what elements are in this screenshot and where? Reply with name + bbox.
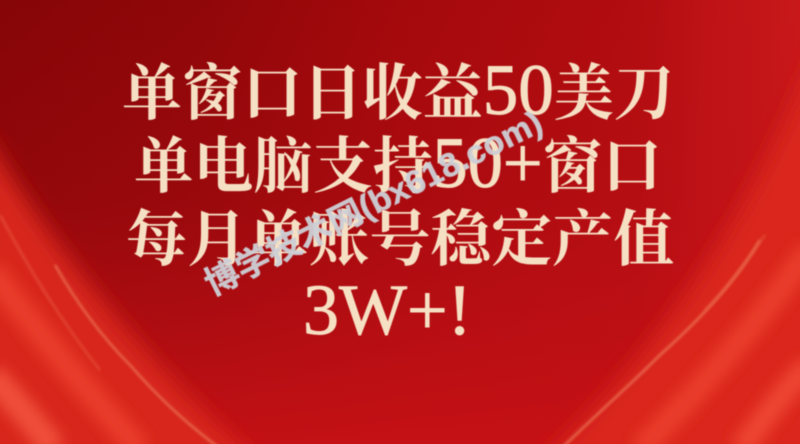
title (122, 50, 674, 350)
watermark: 博学技术网(bx618.com) (199, 103, 548, 302)
bottom right ribbon (540, 40, 800, 444)
title line 1: 单窗口日收益50美刀 (122, 50, 674, 130)
title line 2: 单电脑支持50+窗口 (134, 123, 662, 203)
title line 3: 每月单账号稳定产值 (126, 206, 674, 274)
title line 4: 3W+! (303, 270, 472, 350)
bottom left ribbon (0, 125, 260, 444)
